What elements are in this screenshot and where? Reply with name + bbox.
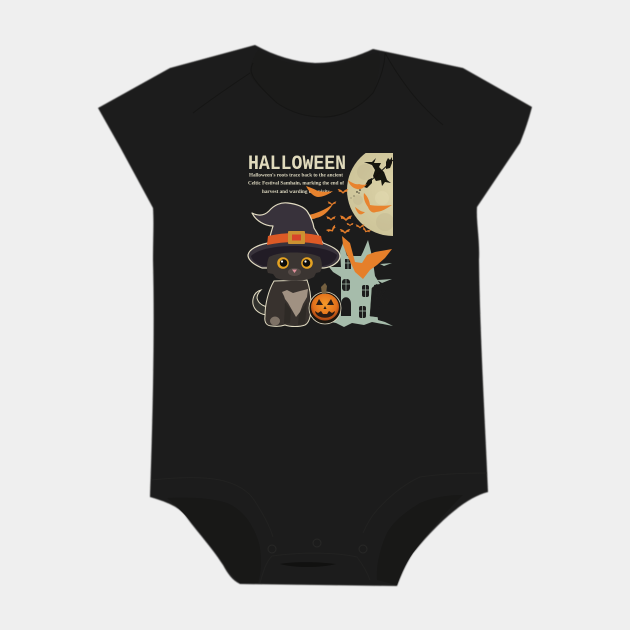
cat tail bbox=[253, 290, 270, 315]
moon bbox=[347, 153, 393, 236]
collar and shoulder seams bbox=[193, 53, 443, 125]
onesie garment bbox=[98, 45, 532, 586]
leg openings bbox=[167, 495, 463, 585]
orange bats bbox=[306, 180, 392, 234]
cat with witch hat bbox=[248, 203, 341, 326]
cat muzzle bbox=[288, 268, 301, 276]
description text: Celtic Festival Samhain, marking the end of bbox=[248, 180, 344, 186]
hat band and buckle bbox=[267, 233, 323, 245]
description text: Halloween's roots trace back to the ancient bbox=[249, 172, 343, 178]
halloween artwork bbox=[247, 153, 394, 327]
large orange bat bbox=[342, 236, 392, 279]
hat brim underside bbox=[251, 246, 337, 266]
paws bbox=[270, 316, 280, 326]
title: HALLOWEEN bbox=[248, 153, 346, 176]
chest fur bbox=[282, 289, 308, 317]
witch silhouette on broom bbox=[351, 157, 393, 198]
haunted house bbox=[325, 240, 393, 327]
house windows and door bbox=[341, 259, 369, 318]
description text: harvest and warding off spirits. bbox=[262, 189, 332, 195]
cat body bbox=[265, 280, 311, 326]
witch hat bbox=[248, 203, 340, 268]
legs bbox=[284, 302, 307, 325]
description text bbox=[248, 172, 344, 195]
snap buttons bbox=[268, 539, 367, 553]
cat head bbox=[267, 252, 322, 281]
cat eyes bbox=[277, 257, 289, 269]
bare tree bbox=[370, 284, 388, 317]
garment body bbox=[98, 45, 532, 586]
wisps bbox=[377, 263, 392, 283]
pumpkin bbox=[309, 283, 341, 324]
leg hems and crotch bbox=[151, 473, 487, 583]
neck back panel bbox=[250, 50, 380, 117]
pumpkin face bbox=[315, 299, 335, 318]
